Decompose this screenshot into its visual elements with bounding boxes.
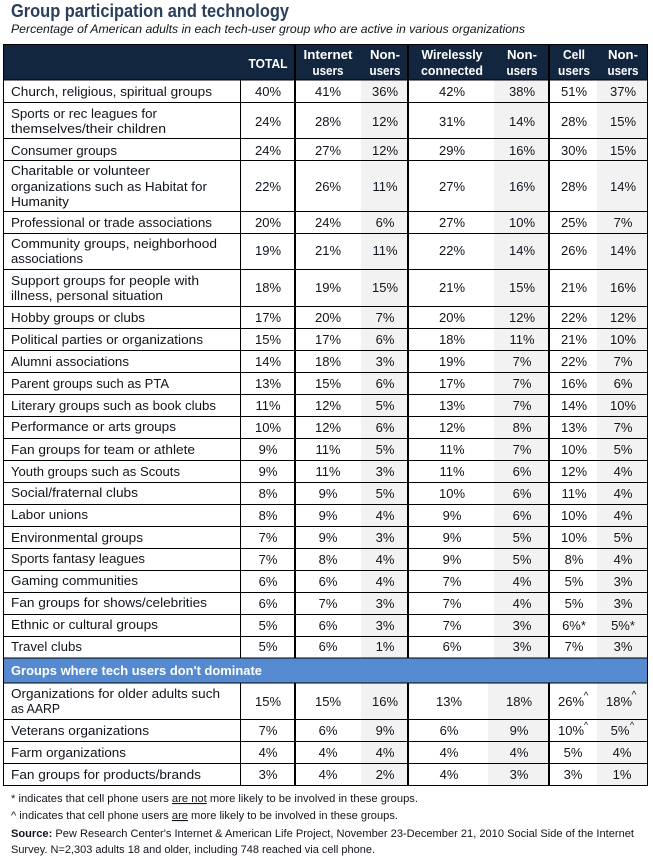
percentage values: 6%: [440, 723, 459, 738]
percentage values: 5%: [259, 639, 278, 654]
percentage values: 4%: [614, 486, 633, 501]
percentage values: 6%: [443, 639, 462, 654]
table header: TOTAL: [248, 56, 288, 71]
percentage values: 4%: [319, 767, 338, 782]
percentage values: 25%: [561, 215, 587, 230]
percentage values: 3%: [513, 618, 532, 633]
percentage values: 7%: [614, 354, 633, 369]
percentage values: 21%: [561, 332, 587, 347]
percentage values: 18%: [439, 332, 465, 347]
table header: Wirelessly: [422, 47, 483, 62]
percentage values: 11%: [255, 398, 281, 413]
percentage values: 11%: [439, 464, 465, 479]
percentage values: 10%: [558, 723, 584, 738]
percentage values: 3%: [513, 639, 532, 654]
percentage values: 6%: [319, 723, 338, 738]
row labels: Parent groups such as PTA: [11, 376, 169, 391]
percentage values: 27%: [439, 179, 465, 194]
percentage values: 9%: [259, 442, 278, 457]
percentage values: 12%: [439, 420, 465, 435]
percentage values: 10%: [561, 530, 587, 545]
percentage values: 11%: [315, 464, 341, 479]
percentage values: 3%: [510, 767, 529, 782]
percentage values: 36%: [372, 84, 398, 99]
percentage values: 6%: [513, 486, 532, 501]
percentage values: 21%: [315, 243, 341, 258]
percentage values: 28%: [561, 179, 587, 194]
percentage values: 5%: [565, 574, 584, 589]
percentage values: 8%: [565, 552, 584, 567]
percentage values: 5%: [614, 442, 633, 457]
percentage values: 4%: [376, 745, 395, 760]
table header: Internet: [304, 47, 353, 62]
percentage values: 4%: [440, 767, 459, 782]
percentage values: 22%: [439, 243, 465, 258]
percentage values: 16%: [509, 143, 535, 158]
percentage values: ^: [630, 720, 635, 730]
percentage values: 13%: [439, 398, 465, 413]
percentage values: 28%: [315, 114, 341, 129]
percentage values: ^: [584, 720, 589, 730]
row labels: Farm organizations: [11, 745, 127, 760]
percentage values: 15%: [315, 376, 341, 391]
percentage values: 14%: [255, 354, 281, 369]
percentage values: 19%: [255, 243, 281, 258]
percentage values: 9%: [259, 464, 278, 479]
percentage values: 10%: [610, 398, 636, 413]
percentage values: 8%: [513, 420, 532, 435]
percentage values: 13%: [561, 420, 587, 435]
percentage values: 1%: [376, 639, 395, 654]
table header: users: [506, 63, 538, 78]
row labels: organizations such as Habitat for: [11, 179, 208, 194]
row labels: Consumer groups: [11, 143, 118, 158]
table header: Non-: [608, 47, 638, 62]
percentage values: 6%: [319, 574, 338, 589]
percentage values: 15%: [315, 694, 341, 709]
percentage values: 7%: [319, 596, 338, 611]
percentage values: 21%: [561, 280, 587, 295]
table header: users: [370, 63, 400, 78]
percentage values: 9%: [376, 723, 395, 738]
percentage values: 12%: [315, 398, 341, 413]
row labels: Political parties or organizations: [11, 332, 204, 347]
percentage values: 15%: [610, 143, 636, 158]
percentage values: 12%: [372, 114, 398, 129]
footnotes: * indicates that cell phone users are not more likely to be involved in these groups.: [11, 793, 418, 805]
percentage values: 15%: [372, 280, 398, 295]
percentage values: 8%: [259, 508, 278, 523]
percentage values: 13%: [255, 376, 281, 391]
percentage values: 14%: [509, 114, 535, 129]
percentage values: 20%: [255, 215, 281, 230]
percentage values: 17%: [255, 310, 281, 325]
percentage values: 31%: [439, 114, 465, 129]
percentage values: 6%: [513, 464, 532, 479]
percentage values: 5%: [259, 618, 278, 633]
percentage values: 3%: [376, 464, 395, 479]
percentage values: 19%: [315, 280, 341, 295]
percentage values: 14%: [509, 243, 535, 258]
row labels: Fan groups for team or athlete: [11, 442, 195, 457]
percentage values: 27%: [439, 215, 465, 230]
row labels: Fan groups for products/brands: [11, 767, 202, 782]
row labels: Fan groups for shows/celebrities: [11, 595, 208, 610]
percentage values: 7%: [259, 723, 278, 738]
percentage values: 26%: [561, 243, 587, 258]
row labels: Hobby groups or clubs: [11, 310, 146, 325]
table header: users: [608, 63, 638, 78]
percentage values: 15%: [509, 280, 535, 295]
percentage values: 3%: [614, 639, 633, 654]
percentage values: 5%: [376, 398, 395, 413]
percentage values: 8%: [259, 486, 278, 501]
row labels: Performance or arts groups: [11, 419, 177, 434]
percentage values: 12%: [509, 310, 535, 325]
percentage values: 18%: [315, 354, 341, 369]
percentage values: 3%: [259, 767, 278, 782]
percentage values: 15%: [610, 114, 636, 129]
table header: users: [312, 63, 344, 78]
percentage values: ^: [584, 691, 589, 702]
row labels: Humanity: [11, 194, 70, 209]
percentage values: 4%: [376, 552, 395, 567]
percentage values: 7%: [443, 574, 462, 589]
percentage values: 7%: [259, 552, 278, 567]
footnotes: ^ indicates that cell phone users are more likely to be involved in these groups.: [11, 810, 398, 822]
percentage values: 16%: [372, 694, 398, 709]
row labels: associations: [11, 251, 83, 266]
row labels: Youth groups such as Scouts: [11, 464, 180, 479]
percentage values: 10%: [509, 215, 535, 230]
percentage values: 21%: [439, 280, 465, 295]
percentage values: 4%: [613, 745, 632, 760]
percentage values: 5%*: [611, 618, 635, 633]
percentage values: 24%: [255, 143, 281, 158]
percentage values: 26%: [558, 694, 584, 709]
subtitle: Percentage of American adults in each tech-user group who are active in various organizations: [11, 24, 525, 36]
row labels: Support groups for people with: [11, 273, 199, 288]
percentage values: 9%: [443, 552, 462, 567]
percentage values: 24%: [315, 215, 341, 230]
percentage values: 6%: [376, 376, 395, 391]
percentage values: 18%: [606, 694, 632, 709]
percentage values: 11%: [372, 179, 398, 194]
percentage values: 7%: [443, 596, 462, 611]
percentage values: 4%: [614, 508, 633, 523]
row labels: Labor unions: [11, 507, 89, 522]
footnotes: Source: Pew Research Center's Internet & American Life Project, November 23-December 21, 2010 Social Side of the Internet: [11, 828, 634, 840]
percentage values: 7%: [513, 354, 532, 369]
percentage values: 18%: [506, 694, 532, 709]
percentage values: 28%: [561, 114, 587, 129]
percentage values: 6%: [259, 574, 278, 589]
percentage values: 18%: [255, 280, 281, 295]
percentage values: 4%: [259, 745, 278, 760]
percentage values: 3%: [614, 574, 633, 589]
percentage values: 10%: [561, 442, 587, 457]
percentage values: 26%: [315, 179, 341, 194]
row labels: themselves/their children: [11, 121, 166, 136]
percentage values: 4%: [319, 745, 338, 760]
percentage values: 12%: [610, 310, 636, 325]
percentage values: ^: [632, 690, 637, 701]
percentage values: 51%: [561, 84, 587, 99]
percentage values: 4%: [513, 574, 532, 589]
row labels: Social/fraternal clubs: [11, 485, 139, 500]
section band: groups where tech users don't dominate: [4, 658, 648, 683]
percentage values: 6%: [513, 508, 532, 523]
table header: [4, 44, 648, 80]
percentage values: 10%: [561, 508, 587, 523]
percentage values: 10%: [439, 486, 465, 501]
percentage values: 9%: [319, 508, 338, 523]
percentage values: 7%: [376, 310, 395, 325]
percentage values: 8%: [319, 552, 338, 567]
percentage values: 9%: [443, 508, 462, 523]
percentage values: [255, 84, 637, 782]
row labels: illness, personal situation: [11, 288, 163, 303]
percentage values: 7%: [614, 420, 633, 435]
percentage values: 7%: [513, 398, 532, 413]
percentage values: 4%: [614, 464, 633, 479]
percentage values: 4%: [376, 508, 395, 523]
percentage values: 3%: [564, 767, 583, 782]
table header: Cell: [563, 47, 585, 62]
percentage values: 4%: [510, 745, 529, 760]
percentage values: 14%: [610, 243, 636, 258]
footnotes: [11, 793, 634, 856]
percentage values: 14%: [610, 179, 636, 194]
percentage values: 3%: [376, 596, 395, 611]
row labels: Gaming communities: [11, 573, 139, 588]
percentage values: 12%: [315, 420, 341, 435]
percentage values: 11%: [439, 442, 465, 457]
percentage values: 4%: [614, 552, 633, 567]
percentage values: 10%: [610, 332, 636, 347]
percentage values: 4%: [376, 574, 395, 589]
percentage values: 11%: [372, 243, 398, 258]
percentage values: 9%: [319, 530, 338, 545]
percentage values: 3%: [376, 354, 395, 369]
percentage values: 5%: [611, 723, 630, 738]
percentage values: 22%: [255, 179, 281, 194]
percentage values: 20%: [439, 310, 465, 325]
percentage values: 29%: [439, 143, 465, 158]
table header: Non-: [370, 47, 400, 62]
percentage values: 6%: [614, 376, 633, 391]
percentage values: 11%: [315, 442, 341, 457]
percentage values: 24%: [255, 114, 281, 129]
table header: Non-: [507, 47, 537, 62]
percentage values: 5%: [376, 442, 395, 457]
percentage values: 41%: [315, 84, 341, 99]
percentage values: 5%: [614, 530, 633, 545]
percentage values: 37%: [610, 84, 636, 99]
row labels: Charitable or volunteer: [11, 163, 151, 178]
table header: connected: [421, 63, 483, 78]
percentage values: 7%: [565, 639, 584, 654]
row labels: Veterans organizations: [11, 723, 150, 738]
percentage values: 4%: [440, 745, 459, 760]
percentage values: 16%: [561, 376, 587, 391]
percentage values: 6%: [376, 332, 395, 347]
percentage values: 2%: [376, 767, 395, 782]
percentage values: 12%: [561, 464, 587, 479]
percentage values: 16%: [509, 179, 535, 194]
percentage values: 7%: [513, 376, 532, 391]
percentage values: 5%: [565, 596, 584, 611]
percentage values: 10%: [255, 420, 281, 435]
percentage values: 16%: [610, 280, 636, 295]
percentage values: 5%: [564, 745, 583, 760]
percentage values: 5%: [376, 486, 395, 501]
percentage values: 12%: [372, 143, 398, 158]
percentage values: 7%: [513, 442, 532, 457]
row labels: Church, religious, spiritual groups: [11, 84, 213, 99]
percentage values: 22%: [561, 310, 587, 325]
row labels: Environmental groups: [11, 530, 144, 545]
footnotes: Survey. N=2,303 adults 18 and older, including 748 reached via cell phone.: [11, 844, 375, 856]
percentage values: 13%: [436, 694, 462, 709]
percentage values: 9%: [319, 486, 338, 501]
percentage values: 17%: [439, 376, 465, 391]
row labels: Organizations for older adults such: [11, 686, 220, 701]
percentage values: 20%: [315, 310, 341, 325]
percentage values: 4%: [513, 596, 532, 611]
row labels: [11, 84, 220, 782]
percentage values: 22%: [561, 354, 587, 369]
percentage values: 42%: [439, 84, 465, 99]
row labels: Travel clubs: [11, 639, 82, 654]
percentage values: 6%: [376, 215, 395, 230]
percentage values: 9%: [510, 723, 529, 738]
percentage values: 15%: [255, 694, 281, 709]
percentage values: 19%: [439, 354, 465, 369]
row labels: Literary groups such as book clubs: [11, 398, 217, 413]
percentage values: 3%: [376, 618, 395, 633]
percentage values: 5%: [513, 530, 532, 545]
percentage values: 11%: [561, 486, 587, 501]
percentage values: 27%: [315, 143, 341, 158]
percentage values: 17%: [315, 332, 341, 347]
percentage values: 6%: [319, 618, 338, 633]
percentage values: 6%: [319, 639, 338, 654]
table header: users: [558, 63, 590, 78]
percentage values: 6%: [259, 596, 278, 611]
row labels: as AARP: [11, 701, 60, 716]
row labels: Professional or trade associations: [11, 215, 213, 230]
row labels: Community groups, neighborhood: [11, 236, 217, 251]
row labels: Ethnic or cultural groups: [11, 617, 159, 632]
row labels: Alumni associations: [11, 354, 130, 369]
percentage values: 6%*: [562, 618, 586, 633]
percentage values: 6%: [376, 420, 395, 435]
row labels: Sports or rec leagues for: [11, 106, 158, 121]
percentage values: 7%: [259, 530, 278, 545]
percentage values: 40%: [255, 84, 281, 99]
percentage values: 14%: [561, 398, 587, 413]
title: Group participation and technology: [11, 0, 290, 21]
percentage values: 7%: [614, 215, 633, 230]
percentage values: 7%: [443, 618, 462, 633]
percentage values: 3%: [614, 596, 633, 611]
percentage values: 1%: [613, 767, 632, 782]
percentage values: 15%: [255, 332, 281, 347]
percentage values: 9%: [443, 530, 462, 545]
percentage values: 11%: [509, 332, 535, 347]
row labels: Sports fantasy leagues: [11, 551, 146, 566]
percentage values: 5%: [513, 552, 532, 567]
percentage values: 38%: [509, 84, 535, 99]
percentage values: 3%: [376, 530, 395, 545]
percentage values: 30%: [561, 143, 587, 158]
section band: groups where tech users don't dominate: Groups where tech users don't dominate: [11, 663, 262, 678]
